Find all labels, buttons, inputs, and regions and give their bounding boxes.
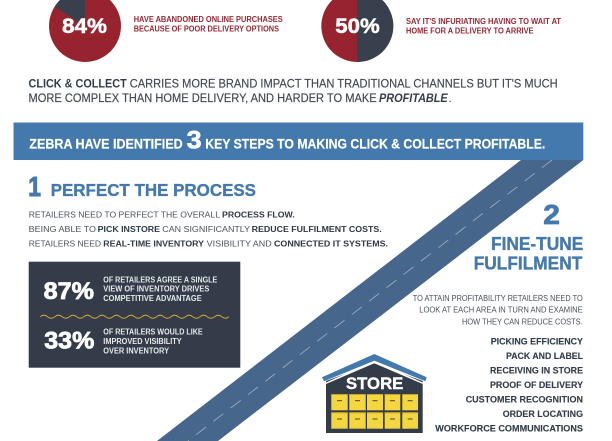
text block: step 1 body: PICK INSTORE bbox=[98, 224, 160, 234]
list: fulfilment areas: RECEIVING IN STORE bbox=[490, 365, 583, 375]
heading: step 2 fine-tune fulfilment: FULFILMENT bbox=[474, 253, 582, 273]
list: fulfilment areas: PROOF OF DELIVERY bbox=[490, 380, 584, 390]
stat text: abandoned purchases: HAVE ABANDONED ONLINE PURCHASES bbox=[134, 15, 283, 24]
text block: click and collect intro: CLICK & COLLECT bbox=[28, 78, 127, 90]
text block: step 2 body bbox=[413, 293, 583, 326]
stat: 87%: VIEW OF INVENTORY DRIVES bbox=[103, 285, 210, 294]
stat: 33%: IMPROVED VISIBILITY bbox=[103, 337, 182, 346]
text block: step 2 body: LOOK AT EACH AREA IN TURN AND EXAMINE bbox=[419, 305, 583, 315]
stat text: waiting at home: SAY IT'S INFURIATING HAVING TO WAIT AT bbox=[406, 17, 561, 26]
icon: store: STORE bbox=[346, 374, 403, 393]
text block: step 1 body: BEING ABLE TO bbox=[29, 224, 96, 234]
text block: click and collect intro bbox=[28, 78, 558, 105]
text block: step 1 body: REAL-TIME INVENTORY bbox=[103, 239, 204, 249]
text block: step 1 body: CAN SIGNIFICANTLY bbox=[162, 224, 250, 234]
road bbox=[157, 160, 583, 441]
list: fulfilment areas: ORDER LOCATING bbox=[503, 409, 583, 419]
list: fulfilment areas: CUSTOMER RECOGNITION bbox=[466, 394, 583, 404]
pie chart: 84%: 84% bbox=[62, 15, 107, 38]
stat text: abandoned purchases: BECAUSE OF POOR DELIVERY OPTIONS bbox=[134, 24, 280, 33]
list: fulfilment areas: PACK AND LABEL bbox=[506, 351, 583, 361]
text block: step 2 body: HOW THEY CAN REDUCE COSTS. bbox=[462, 316, 583, 326]
text block: step 1 body: REDUCE FULFILMENT COSTS. bbox=[252, 224, 382, 234]
text block: click and collect intro: PROFITABLE bbox=[379, 93, 448, 105]
heading: step 2 fine-tune fulfilment bbox=[474, 199, 583, 273]
panel: inventory stats bbox=[29, 262, 240, 368]
heading: step 1 perfect the process bbox=[28, 171, 256, 202]
text block: step 1 body: VISIBILITY AND bbox=[207, 239, 272, 249]
text block: step 2 body: TO ATTAIN PROFITABILITY RETAILERS NEED TO bbox=[413, 293, 583, 303]
pie chart: 50% bbox=[321, 0, 393, 62]
icon: store bbox=[322, 354, 427, 433]
stat text: waiting at home bbox=[406, 17, 561, 36]
pie chart: 84% bbox=[49, 0, 121, 62]
heading: step 1 perfect the process: PERFECT THE PROCESS bbox=[51, 180, 256, 200]
text block: step 1 body bbox=[29, 209, 388, 249]
pie chart: 50%: 50% bbox=[335, 15, 380, 38]
stat: 33%: 33% bbox=[44, 328, 94, 355]
stat: 87%: 87% bbox=[44, 278, 94, 305]
stat: 33%: OVER INVENTORY bbox=[103, 346, 170, 355]
text block: step 1 body: RETAILERS NEED bbox=[29, 239, 101, 249]
banner: KEY STEPS TO MAKING CLICK & COLLECT PROFITABLE. bbox=[205, 137, 545, 152]
list: fulfilment areas bbox=[435, 336, 584, 434]
stat text: waiting at home: HOME FOR A DELIVERY TO ARRIVE bbox=[406, 27, 534, 36]
text block: click and collect intro: . bbox=[448, 93, 452, 105]
stat: 33% bbox=[44, 328, 203, 355]
heading: step 2 fine-tune fulfilment: FINE-TUNE bbox=[491, 234, 583, 254]
text block: step 1 body: CONNECTED IT SYSTEMS. bbox=[274, 239, 388, 249]
stat: 87% bbox=[44, 275, 218, 305]
text block: step 1 body: RETAILERS NEED TO PERFECT THE OVERALL bbox=[29, 209, 220, 219]
heading: step 1 perfect the process: 1 bbox=[28, 171, 41, 202]
stat: 87%: OF RETAILERS AGREE A SINGLE bbox=[103, 275, 218, 284]
text block: step 1 body: PROCESS FLOW. bbox=[222, 209, 295, 219]
banner: ZEBRA HAVE IDENTIFIED bbox=[29, 137, 183, 152]
list: fulfilment areas: PICKING EFFICIENCY bbox=[491, 336, 584, 346]
stat: 33%: OF RETAILERS WOULD LIKE bbox=[103, 328, 203, 337]
stat text: abandoned purchases bbox=[134, 15, 283, 33]
heading: step 2 fine-tune fulfilment: 2 bbox=[543, 199, 560, 230]
text block: click and collect intro: MORE COMPLEX THAN HOME DELIVERY, AND HARDER TO MAKE bbox=[28, 93, 377, 105]
text block: click and collect intro: CARRIES MORE BRAND IMPACT THAN TRADITIONAL CHANNELS BUT IT'S MUCH bbox=[130, 78, 558, 90]
banner: 3 bbox=[187, 126, 202, 154]
stat: 87%: COMPETITIVE ADVANTAGE bbox=[103, 294, 202, 303]
banner bbox=[14, 122, 583, 160]
list: fulfilment areas: WORKFORCE COMMUNICATIONS bbox=[435, 424, 583, 434]
boxes bbox=[331, 394, 418, 429]
